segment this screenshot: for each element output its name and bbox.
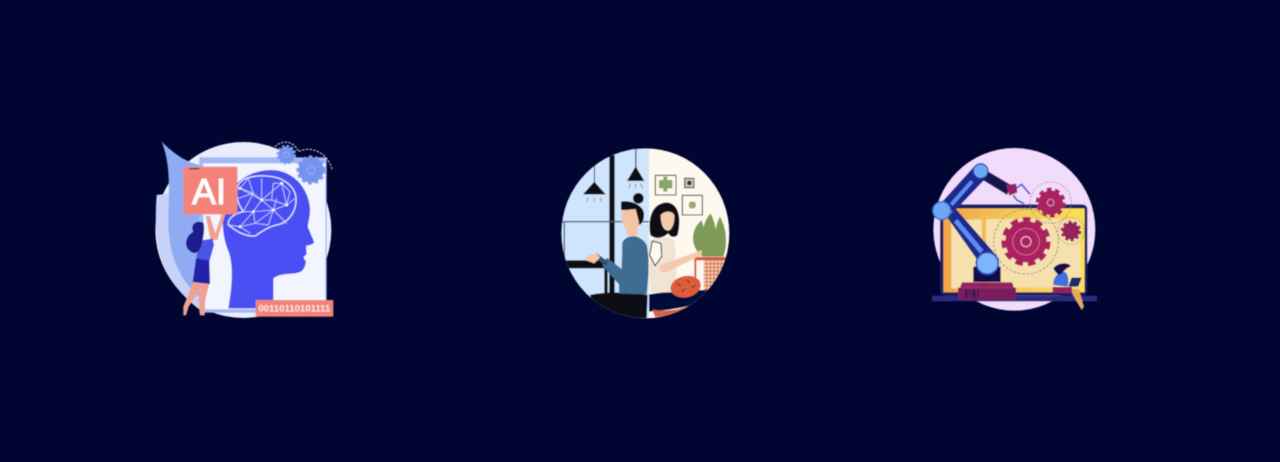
woman [649, 202, 713, 317]
man [585, 193, 649, 318]
window frame [558, 155, 649, 298]
laptop screen [940, 204, 1087, 296]
brain network [228, 176, 296, 236]
cat [670, 275, 702, 299]
binary label [256, 300, 333, 317]
woman with laptop [1053, 263, 1084, 310]
head silhouette [223, 170, 314, 308]
illustration: people working [558, 145, 732, 322]
gears [275, 142, 332, 183]
robot arm [933, 164, 1030, 300]
leaf shapes [156, 142, 203, 312]
illustration row [154, 140, 1098, 320]
pendant lamps [583, 145, 644, 202]
background circle [155, 142, 331, 318]
wall pictures [655, 175, 702, 215]
AI card [183, 167, 237, 214]
binary label: 00110110101111 [258, 304, 330, 314]
screen frame [199, 157, 327, 313]
plant [693, 213, 728, 292]
gears [994, 182, 1084, 274]
AI card: AI [192, 171, 226, 212]
background circle [933, 148, 1095, 311]
woman figure [183, 214, 225, 315]
illustration: AI brain [155, 142, 333, 318]
laptop base [932, 296, 1097, 301]
illustration: robot arm and gears [932, 148, 1097, 311]
room background [558, 145, 649, 322]
